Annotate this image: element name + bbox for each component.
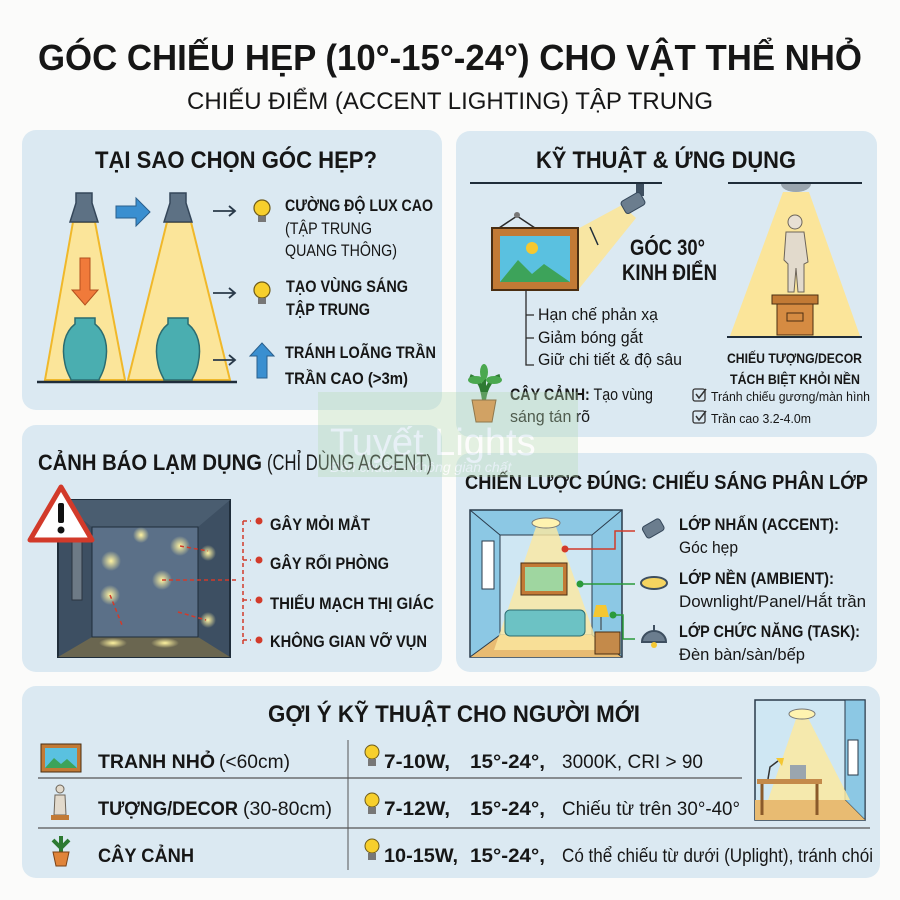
item: high ceiling: TRẦN CAO (>3m) xyxy=(285,369,408,388)
item: high lux xyxy=(213,196,433,260)
caption: statue: CHIẾU TƯỢNG/DECOR xyxy=(727,350,862,366)
layer: accent: LỚP NHẤN (ACCENT): xyxy=(679,515,839,534)
panel: layered lighting xyxy=(456,453,877,672)
row: statue: 7-12W, xyxy=(384,799,450,820)
row: small painting xyxy=(41,744,703,773)
watermark: Tuyết Lights xyxy=(330,422,536,464)
heading: tips: GỢI Ý KỸ THUẬT CHO NGƯỜI MỚI xyxy=(268,700,640,728)
layer: task: LỚP CHỨC NĂNG (TASK): xyxy=(679,622,860,641)
heading: technique: KỸ THUẬT & ỨNG DỤNG xyxy=(536,146,796,174)
layer: accent xyxy=(641,515,839,557)
title: GÓC CHIẾU HẸP (10°-15°-24°) CHO VẬT THỂ NHỎ xyxy=(38,36,862,78)
subtitle: CHIẾU ĐIỂM (ACCENT LIGHTING) TẬP TRUNG xyxy=(187,87,713,115)
panel: beginner tips table xyxy=(22,686,880,878)
row: statue: 15°-24°, xyxy=(470,799,545,820)
row: plant: CÂY CẢNH xyxy=(98,845,194,867)
panel: technique and application xyxy=(456,131,877,437)
item: high lux: CƯỜNG ĐỘ LUX CAO xyxy=(285,196,433,215)
layer: ambient: Downlight/Panel/Hắt trần xyxy=(679,592,866,611)
panel: overuse warning xyxy=(22,425,442,672)
item: high ceiling xyxy=(213,342,436,388)
label: 30 degree: GÓC 30° xyxy=(630,235,705,260)
row: small painting: 15°-24°, xyxy=(470,752,545,773)
layer: ambient xyxy=(641,569,866,611)
list: overuse effects: GÂY RỐI PHÒNG xyxy=(270,553,389,573)
checklist: Tránh chiếu gương/màn hình xyxy=(711,389,870,404)
icon: plant with text xyxy=(468,364,653,426)
layer: ambient: LỚP NỀN (AMBIENT): xyxy=(679,569,834,588)
label: 30 degree: KINH ĐIỂN xyxy=(622,260,717,285)
illustration: two lamps and vases xyxy=(37,193,237,382)
layer: accent: Góc hẹp xyxy=(679,538,738,557)
layer: task: Đèn bàn/sàn/bếp xyxy=(679,645,805,664)
item: high lux: (TẬP TRUNG xyxy=(285,219,372,238)
heading: layered: CHIẾN LƯỢC ĐÚNG: CHIẾU SÁNG PHÂN LỚP xyxy=(465,470,868,494)
checklist xyxy=(693,389,870,426)
row: plant: Có thể chiếu từ dưới (Uplight), tránh chói xyxy=(562,846,873,867)
heading: warning xyxy=(38,450,432,475)
panel: why narrow angle xyxy=(22,130,442,410)
icon: plant with text: CÂY CẢNH: Tạo vùng xyxy=(510,385,653,404)
list: benefits: Giảm bóng gắt xyxy=(538,328,643,347)
watermark: Đèn chuẩn - Không gian chất xyxy=(330,459,512,475)
row: small painting: (<60cm) xyxy=(219,752,290,773)
row: statue: (30-80cm) xyxy=(243,799,332,820)
caption: statue xyxy=(727,350,862,387)
label: 30 degree xyxy=(622,235,717,285)
heading: warning: (CHỈ DÙNG ACCENT) xyxy=(267,450,432,475)
list: benefits xyxy=(526,290,682,369)
row: small painting: TRANH NHỎ xyxy=(98,751,215,773)
row: statue: Chiếu từ trên 30°-40° xyxy=(562,799,740,820)
list: overuse effects: GÂY MỎI MẮT xyxy=(270,515,371,534)
row: small painting: 3000K, CRI > 90 xyxy=(562,752,703,773)
item: focused area: TẬP TRUNG xyxy=(286,300,370,319)
row: statue: TƯỢNG/DECOR xyxy=(98,799,238,820)
illustration: statue under downlight xyxy=(727,183,862,337)
caption: statue: TÁCH BIỆT KHỎI NỀN xyxy=(730,370,860,387)
item: high ceiling: TRÁNH LOÃNG TRẦN xyxy=(285,342,436,362)
heading: why: TẠI SAO CHỌN GÓC HẸP? xyxy=(95,146,377,174)
table grid xyxy=(38,740,870,870)
row: plant xyxy=(53,836,873,867)
row: plant: 15°-24°, xyxy=(470,846,545,867)
illustration: desk room xyxy=(755,700,865,820)
row: small painting: 7-10W, xyxy=(384,752,450,773)
icon: plant with text: sáng tán rõ xyxy=(510,407,590,426)
layer: task xyxy=(642,622,860,664)
item: focused area: TẠO VÙNG SÁNG xyxy=(286,277,408,296)
checklist: Trần cao 3.2-4.0m xyxy=(711,411,811,426)
list: overuse effects: KHÔNG GIAN VỠ VỤN xyxy=(270,631,427,651)
row: plant: 10-15W, xyxy=(384,846,458,867)
item: focused area xyxy=(213,277,408,319)
list: benefits: Hạn chế phản xạ xyxy=(538,305,659,324)
item: high lux: QUANG THÔNG) xyxy=(285,241,397,260)
list: benefits: Giữ chi tiết & độ sâu xyxy=(538,350,682,369)
illustration: cluttered room xyxy=(58,500,238,657)
row: statue xyxy=(51,785,740,820)
list: overuse effects: THIẾU MẠCH THỊ GIÁC xyxy=(270,594,434,613)
watermark xyxy=(318,392,578,477)
list: overuse effects xyxy=(243,515,434,651)
illustration: spotlight on painting xyxy=(470,183,662,290)
icon: warning triangle xyxy=(30,487,92,540)
illustration: living room xyxy=(470,510,635,657)
heading: warning: CẢNH BÁO LẠM DỤNG xyxy=(38,450,262,475)
